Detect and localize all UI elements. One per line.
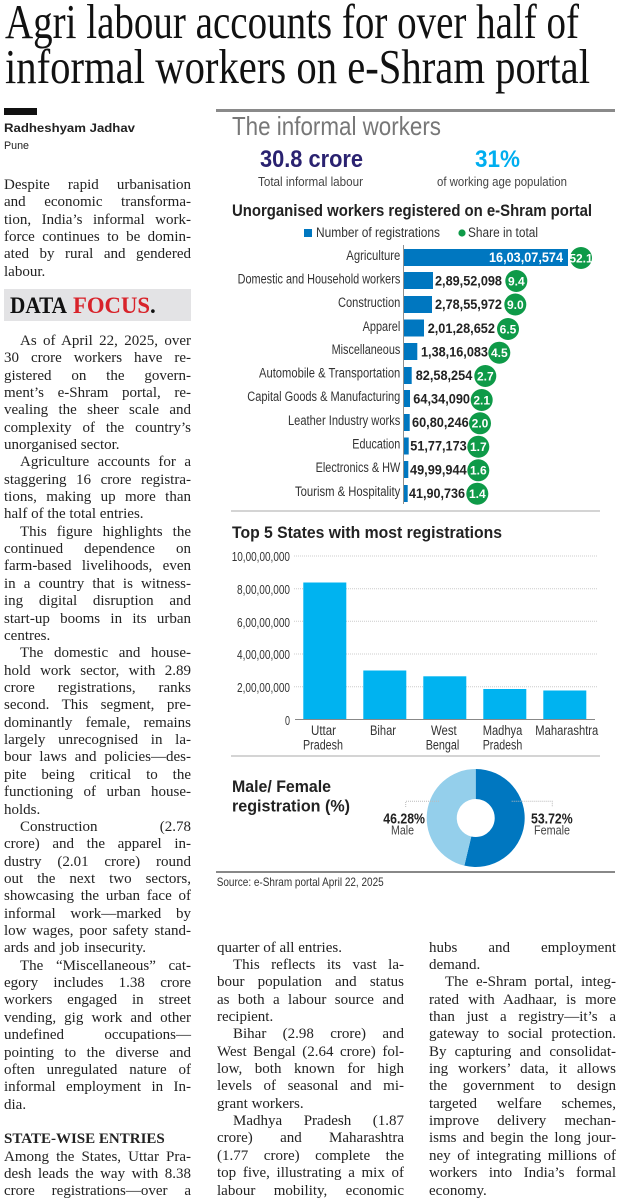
- stat: total informal labour: [258, 146, 363, 189]
- text block: column one article: bour laws and policies—des-: [4, 749, 191, 765]
- byline: Pune: [4, 140, 29, 152]
- stat: total informal labour: Total informal labour: [258, 175, 363, 189]
- share values: 1.4: [469, 487, 486, 501]
- share values: 2.0: [472, 417, 489, 431]
- text block: column two article: labour mobility, economic: [217, 1183, 404, 1199]
- bar values: 2,89,52,098: [435, 274, 502, 288]
- text block: column one article: crore) and the apparel in-: [4, 836, 191, 852]
- share values: 9.4: [508, 274, 525, 288]
- share values: 6.5: [500, 322, 517, 336]
- data focus banner: [4, 289, 191, 321]
- text block: column one article: unorganised sector.: [4, 437, 120, 453]
- text block: column one article: hold work sector, with 2.89: [4, 663, 191, 679]
- text block: column one article: [4, 333, 192, 1199]
- text block: column one article: informal work—marked by: [4, 906, 191, 922]
- data focus banner: .: [150, 293, 156, 318]
- text block: column three article: targeted welfare schemes,: [429, 1096, 616, 1112]
- text block: column one article: The “Miscellaneous” cat-: [20, 958, 191, 974]
- stat: working age population: of working age population: [437, 175, 567, 189]
- text block: column one article: tions, making up more than: [4, 489, 191, 505]
- columns: [303, 582, 586, 720]
- text block: column one article: dia.: [4, 1097, 26, 1113]
- text block: column one article: Among the States, Uttar Pra-: [4, 1149, 191, 1165]
- legend: Share in total: [468, 225, 538, 240]
- text block: column one article: As of April 22, 2025, over: [20, 333, 191, 349]
- text block: column three article: [429, 940, 616, 1199]
- text block: column one article: continued dependence on: [4, 541, 191, 557]
- text block: column two article: levels of seasonal and mi-: [217, 1078, 404, 1094]
- text block: column two article: top five, illustrating a mix of: [217, 1165, 404, 1181]
- text block: column three article: isms and begin the long jour-: [429, 1130, 616, 1146]
- stat: working age population: 31%: [475, 146, 520, 173]
- category labels: Miscellaneous: [332, 342, 400, 357]
- state labels: West: [431, 723, 457, 738]
- text block: column three article: By capturing and consolidat-: [429, 1044, 616, 1060]
- heading: male female registration: Male/ Female: [232, 777, 331, 796]
- text block: intro: tion, India’s informal work-: [4, 212, 191, 228]
- text block: column one article: functioning of urban house-: [4, 784, 191, 800]
- bar values: 49,99,944: [410, 462, 467, 478]
- text block: column two article: recipient.: [217, 1009, 273, 1025]
- category labels: Automobile & Transportation: [259, 366, 400, 380]
- share values: 2.1: [473, 393, 490, 407]
- text block: column two article: grant workers.: [217, 1096, 304, 1112]
- text block: column three article: hubs and employment: [429, 940, 616, 956]
- text block: column two article: (1.77 crore) complete the: [217, 1148, 404, 1164]
- panel: male female donut: [216, 769, 615, 889]
- text block: column one article: crore registrations, ranks: [4, 680, 191, 696]
- y axis labels: 8,00,00,000: [237, 582, 290, 597]
- share values: 1.6: [470, 464, 487, 478]
- text block: column one article: holds.: [4, 802, 40, 818]
- text block: column three article: improve delivery mechan-: [429, 1113, 616, 1129]
- text block: column one article: workers engaged in street: [4, 992, 191, 1008]
- share values: 9.0: [507, 298, 524, 312]
- label: female share: Female: [534, 824, 570, 838]
- state labels: Pradesh: [483, 738, 522, 752]
- text block: column three article: The e-Shram portal, integ-: [445, 974, 616, 990]
- byline: [4, 108, 135, 152]
- text block: column one article: pite being critical to the: [4, 767, 191, 783]
- panel: sector registrations bar chart: [232, 201, 593, 505]
- source note: Source: e-Shram portal April 22, 2025: [217, 875, 384, 889]
- text block: column one article: centres.: [4, 628, 50, 644]
- text block: column three article: demand.: [429, 957, 480, 973]
- text block: column one article: often unregulated nature of: [4, 1062, 191, 1078]
- bar values: 2,78,55,972: [435, 297, 502, 312]
- state labels: Pradesh: [303, 738, 343, 752]
- text block: column one article: showcasing the urban face of: [4, 888, 191, 904]
- label: male share: Male: [391, 824, 414, 838]
- text block: column two article: bour population and status: [217, 974, 404, 990]
- bar values: 82,58,254: [416, 368, 473, 383]
- state labels: Bengal: [426, 738, 459, 752]
- text block: column one article: Agriculture accounts for a: [20, 454, 191, 470]
- text block: column one article: start-up booms in its urban: [4, 611, 191, 627]
- text block: intro: Despite rapid urbanisation: [4, 177, 191, 193]
- text block: column one article: farm-based livelihoods, even: [4, 558, 191, 574]
- y axis labels: [232, 549, 290, 728]
- category labels: Capital Goods & Manufacturing: [247, 389, 400, 404]
- share values: 4.5: [491, 346, 508, 360]
- text block: column two article: low, both known for high: [217, 1061, 404, 1077]
- category labels: Domestic and Household workers: [238, 272, 400, 286]
- bar values: 60,80,246: [412, 415, 469, 430]
- donut chart: [427, 769, 525, 867]
- panel: top 5 states column chart: [232, 523, 599, 752]
- text block: intro: ated by rural and gendered: [4, 246, 191, 262]
- text block: column two article: crore) and Maharashtra: [217, 1130, 404, 1146]
- text block: column one article: dustry (2.01 crore) round: [4, 854, 191, 870]
- text block: column one article: out the next two sectors,: [4, 871, 191, 887]
- state labels: Madhya: [483, 723, 523, 738]
- text block: intro: labour.: [4, 264, 45, 280]
- text block: column two article: Madhya Pradesh (1.87: [233, 1113, 404, 1129]
- heading: male female registration: [232, 777, 350, 816]
- stat: working age population: [437, 146, 567, 189]
- text block: column one article: The domestic and house-: [20, 645, 191, 661]
- text block: column two article: quarter of all entries.: [217, 940, 342, 956]
- text block: column one article: second. This segment, pre-: [4, 697, 191, 713]
- bar values: 64,34,090: [413, 392, 470, 406]
- text block: column three article: the government to design: [429, 1078, 616, 1094]
- text block: intro: and economic transforma-: [4, 194, 191, 210]
- text block: column one article: in a country that is witness-: [4, 576, 191, 592]
- text block: column one article: vending, gig work and other: [4, 1010, 191, 1026]
- y axis labels: 6,00,00,000: [237, 615, 290, 630]
- bar values: 51,77,173: [410, 438, 467, 454]
- text block: column one article: STATE-WISE ENTRIES: [4, 1131, 165, 1147]
- text block: column three article: economy.: [429, 1183, 487, 1199]
- legend: Number of registrations: [316, 225, 440, 240]
- text block: column one article: largely unrecognised in la-: [4, 732, 191, 748]
- share values: [469, 251, 593, 501]
- y axis labels: 4,00,00,000: [237, 647, 290, 662]
- category labels: Agriculture: [346, 248, 400, 263]
- text block: column one article: low wages, poor safety stand-: [4, 923, 191, 939]
- share circles: [466, 247, 592, 505]
- label: female share: [531, 812, 573, 838]
- text block: column three article: gateway to social protection.: [429, 1026, 616, 1042]
- text block: column one article: vealing the sheer scale and: [4, 402, 191, 418]
- stat: total informal labour: 30.8 crore: [260, 146, 363, 173]
- bar values: [409, 250, 563, 501]
- bars: [404, 249, 568, 502]
- heading: male female registration: registration (%): [232, 796, 350, 816]
- share values: 1.7: [470, 440, 487, 454]
- bar values: 2,01,28,652: [428, 321, 495, 336]
- category labels: Tourism & Hospitality: [295, 484, 400, 499]
- text block: column three article: ney of integrating millions of: [429, 1148, 616, 1164]
- state labels: [303, 723, 599, 752]
- share values: 2.7: [477, 369, 494, 383]
- text block: column three article: ing workers’ data, it allows: [429, 1061, 616, 1077]
- text block: column one article: desh leads the way with 8.38: [4, 1166, 191, 1182]
- label: female share: 53.72%: [531, 812, 573, 828]
- y axis labels: 0: [285, 713, 290, 728]
- state labels: Uttar: [311, 723, 336, 738]
- text block: column one article: undefined occupations—: [4, 1027, 191, 1043]
- legend: [304, 225, 538, 240]
- y axis labels: 10,00,00,000: [232, 549, 290, 564]
- label: male share: [383, 812, 425, 838]
- text block: column one article: staggering 16 crore registra-: [4, 472, 191, 488]
- text block: column three article: rated with Aadhaar, is more: [429, 992, 616, 1008]
- text block: column one article: ing digital disruption and: [4, 593, 191, 609]
- title: [5, 0, 590, 94]
- heading: The informal workers: The informal workers: [232, 111, 441, 141]
- category labels: Leather Industry works: [288, 413, 401, 428]
- text block: column two article: This reflects its vast la-: [233, 957, 404, 973]
- text block: column one article: crore registrations—over a: [4, 1183, 191, 1199]
- state labels: Maharashtra: [535, 723, 599, 738]
- category labels: Electronics & HW: [316, 460, 400, 475]
- text block: column one article: ment’s e-Shram portal, re-: [4, 385, 191, 401]
- text block: column two article: West Bengal (2.64 crore) fol-: [217, 1044, 404, 1060]
- text block: column one article: ards and job insecurity.: [4, 940, 146, 956]
- text block: column one article: pointing to the diverse and: [4, 1045, 191, 1061]
- text block: intro: [4, 177, 191, 280]
- text block: column three article: workers into India’s formal: [429, 1165, 616, 1181]
- text block: column three article: than just a registry—it’s a: [429, 1009, 616, 1025]
- text block: column one article: 30 crore workers have re-: [4, 350, 191, 366]
- text block: column one article: egory includes 1.38 crore: [4, 975, 191, 991]
- bar values: 41,90,736: [409, 486, 465, 501]
- text block: column one article: half of the total entries.: [4, 506, 144, 522]
- category labels: Construction: [338, 295, 400, 310]
- label: male share: 46.28%: [383, 812, 425, 828]
- category labels: [238, 248, 401, 499]
- panel: informal workers header: [216, 109, 615, 189]
- text block: intro: force continues to be domin-: [4, 229, 191, 245]
- text block: column one article: gistered on the govern-: [4, 368, 191, 384]
- y axis labels: 2,00,00,000: [237, 680, 290, 695]
- byline: Radheshyam Jadhav: [4, 121, 135, 135]
- share values: 52.1: [569, 251, 593, 265]
- data focus banner: DATA: [10, 293, 67, 318]
- category labels: Education: [352, 436, 400, 452]
- text block: column two article: [217, 940, 404, 1199]
- text block: column two article: as both a labour source and: [217, 992, 404, 1008]
- text block: column two article: Bihar (2.98 crore) and: [233, 1026, 404, 1042]
- text block: column one article: This figure highlights the: [20, 524, 191, 540]
- bar values: 1,38,16,083: [421, 344, 488, 360]
- text block: column one article: complexity of the country’s: [4, 420, 191, 436]
- bar values: 16,03,07,574: [489, 250, 563, 265]
- text block: column one article: Construction (2.78: [20, 819, 191, 835]
- text block: column one article: dominantly female, remains: [4, 715, 191, 731]
- data focus banner: FOCUS: [73, 293, 150, 318]
- category labels: Apparel: [363, 319, 400, 334]
- state labels: Bihar: [370, 723, 396, 738]
- text block: column one article: informal employment in In-: [4, 1079, 191, 1095]
- heading: top 5 states: Top 5 States with most registrations: [232, 523, 502, 542]
